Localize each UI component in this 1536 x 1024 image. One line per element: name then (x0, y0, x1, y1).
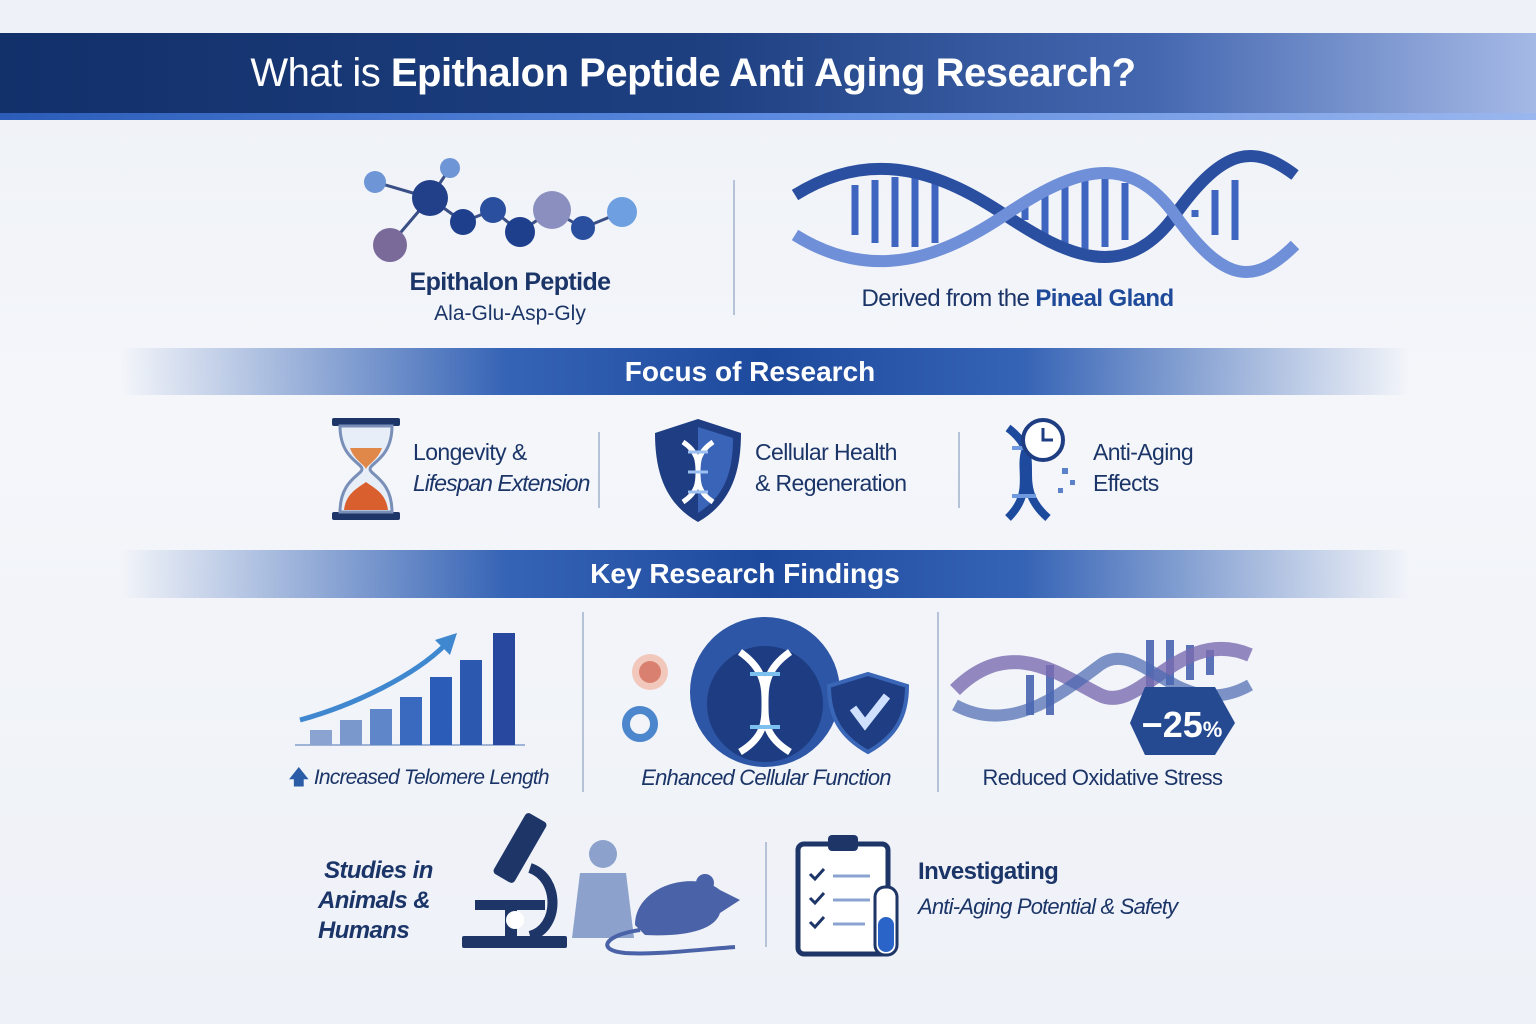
banner: Focus of Research (120, 348, 1410, 395)
text: studies: Studies in (324, 857, 433, 884)
text: pineal: Derived from the Pineal Gland (861, 285, 1174, 312)
text: studies (318, 857, 433, 944)
icon: hourglass (332, 418, 400, 520)
banner: Key Research Findings (120, 550, 1410, 598)
icon: DNA clock (1005, 418, 1075, 521)
icon: human silhouette (572, 840, 634, 938)
icon: cellular function (622, 617, 909, 767)
icon: shield DNA (655, 419, 741, 522)
text: oxidative: Reduced Oxidative Stress (983, 765, 1222, 790)
text: anti-aging: Effects (1093, 470, 1159, 496)
text: cellular (755, 439, 906, 496)
text: anti-aging: Anti-Aging (1093, 439, 1193, 465)
text: potential: Anti-Aging Potential & Safety (918, 894, 1177, 919)
icon: DNA with badge (950, 640, 1253, 755)
text: longevity: Longevity & (413, 439, 527, 465)
text: cellular function: Enhanced Cellular Function (641, 765, 891, 790)
icon: rat (605, 874, 740, 956)
text: investigating: Investigating (918, 858, 1058, 885)
icon: molecule (364, 158, 637, 262)
icon: clipboard with test tube (796, 835, 898, 956)
text: telomere: 🡅 Increased Telomere Length (288, 766, 549, 789)
text: cellular: & Regeneration (755, 470, 906, 496)
icon: DNA with badge: −25% (1142, 704, 1222, 745)
title: What is Epithalon Peptide Anti Aging Research? (250, 51, 1136, 95)
text: sequence: Ala-Glu-Asp-Gly (434, 302, 586, 325)
text: cellular: Cellular Health (755, 439, 897, 465)
text: longevity: Lifespan Extension (413, 470, 589, 496)
text: studies: Humans (318, 917, 409, 944)
chart: telomere bars (295, 633, 525, 746)
text: Epithalon Peptide: Epithalon Peptide (410, 268, 610, 296)
text: longevity (413, 439, 590, 496)
text: studies: Animals & (318, 887, 430, 914)
icon: DNA helix top (792, 150, 1300, 278)
title bar (0, 33, 1536, 113)
banner: Focus of Research: Focus of Research (625, 356, 875, 387)
banner: Key Research Findings: Key Research Findings (590, 558, 900, 589)
icon: microscope (462, 813, 567, 948)
text: anti-aging (1093, 439, 1193, 496)
